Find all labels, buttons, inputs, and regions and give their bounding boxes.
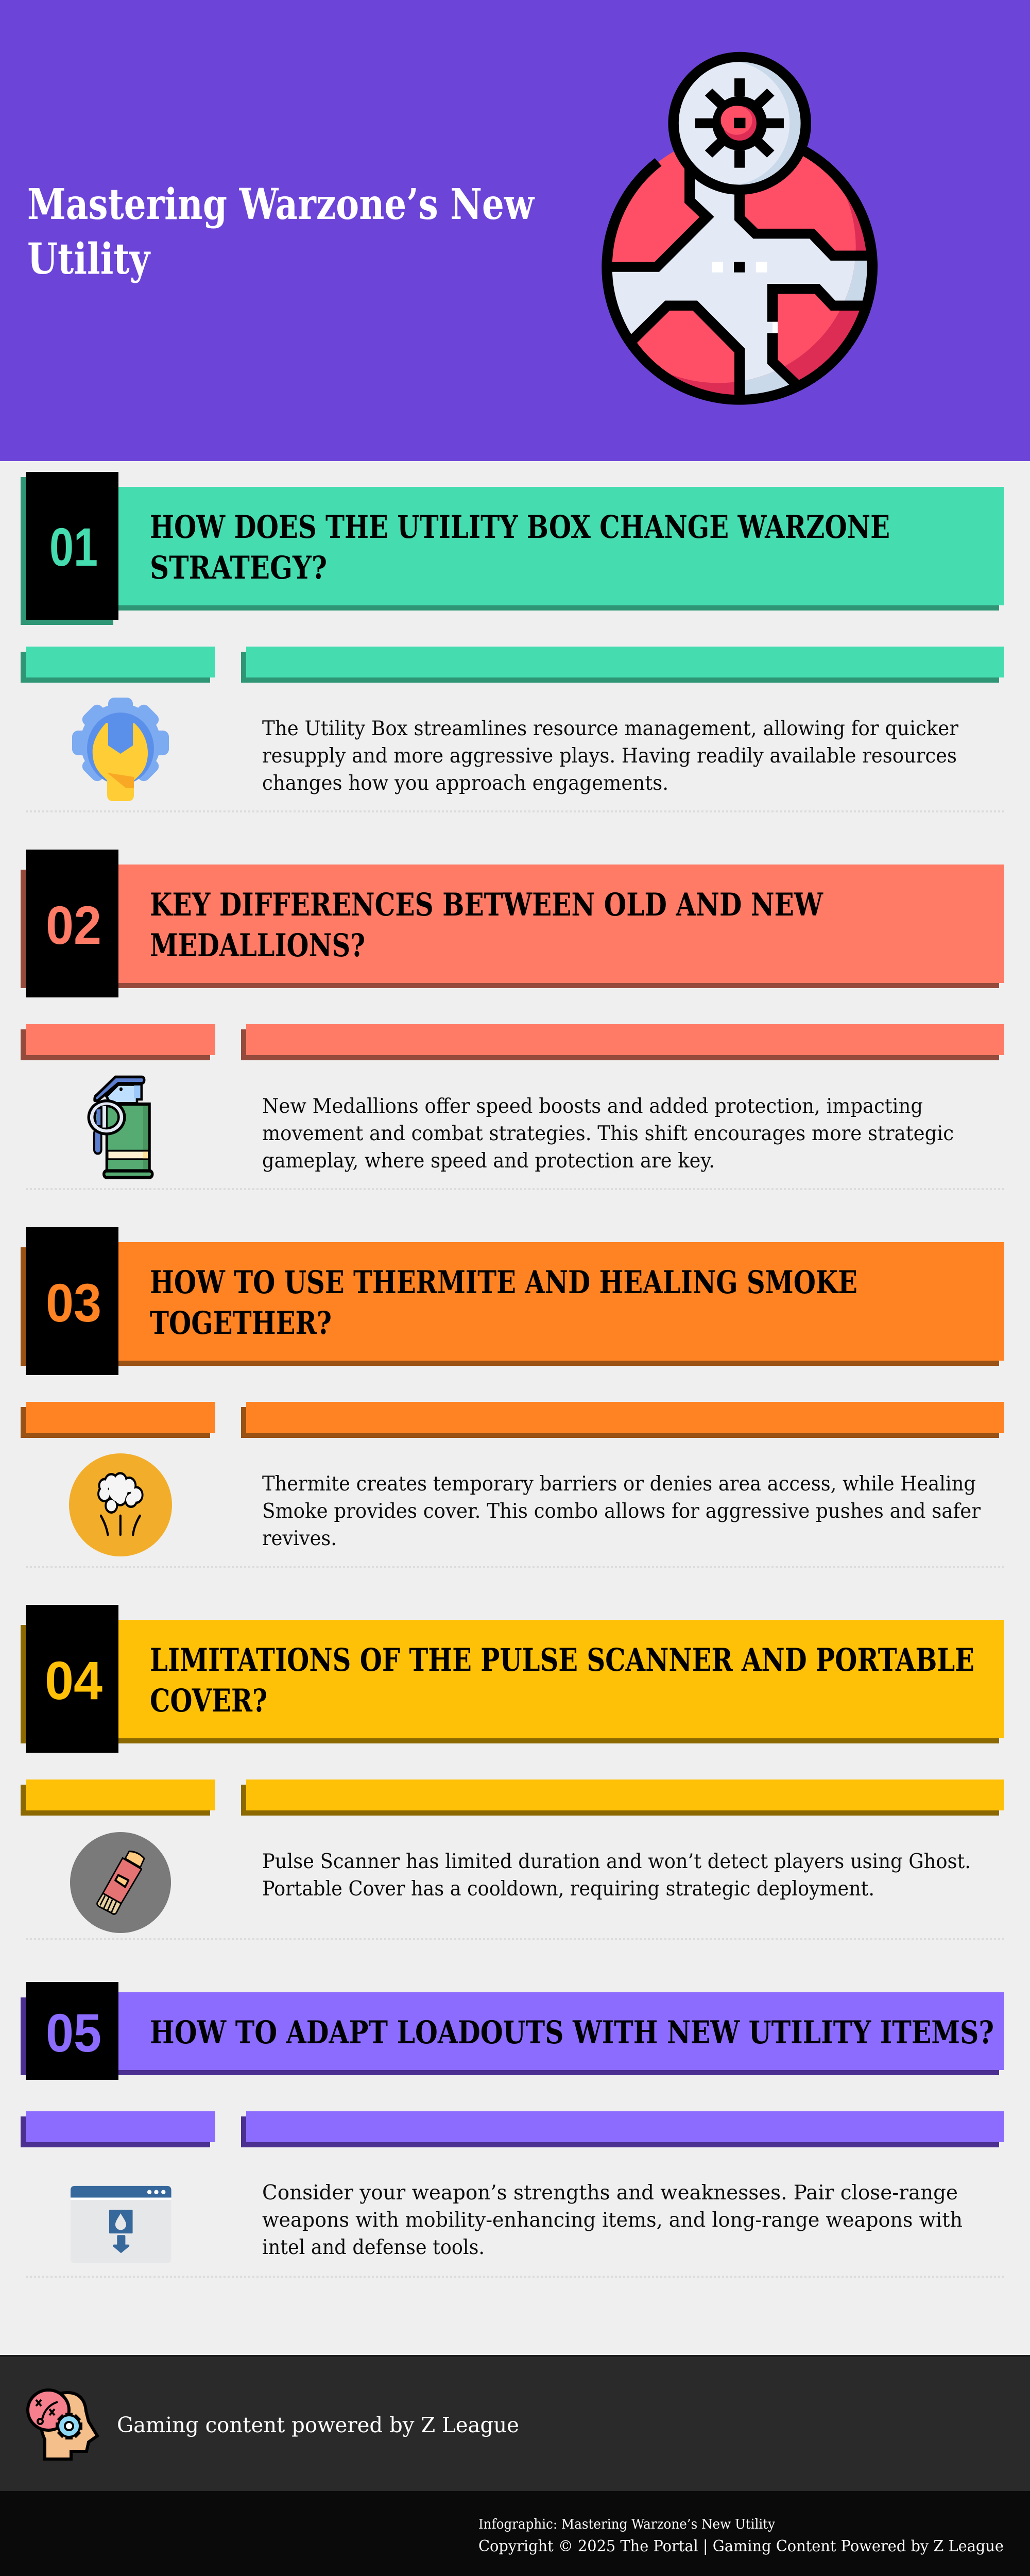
section 5 text: Consider your weapon’s strengths and weaknesses. Pair close-range (262, 2181, 958, 2205)
section 2 number (26, 850, 118, 997)
section 1 text (262, 717, 958, 795)
section 1 text: resupply and more aggressive plays. Having readily available resources (262, 744, 957, 768)
section 1 number (21, 472, 118, 625)
section 3 text: Thermite creates temporary barriers or denies area access, while Healing (262, 1472, 976, 1496)
section 2 number: 02 (46, 895, 101, 956)
section 5 (21, 1982, 1004, 2277)
section 3 (21, 1227, 1004, 1567)
section 2 colour bars (21, 1024, 1004, 1060)
copyright line: Copyright © 2025 The Portal | Gaming Content Powered by Z League (478, 2537, 1004, 2555)
section 4 (21, 1605, 1004, 1939)
section 3 heading band (21, 1242, 1004, 1366)
section 1 text: The Utility Box streamlines resource management, allowing for quicker (262, 717, 958, 740)
section 5 number: 05 (46, 2003, 101, 2063)
section 3 heading band: HOW TO USE THERMITE AND HEALING SMOKE (150, 1264, 857, 1301)
section 5 colour bars (21, 2111, 1004, 2147)
icon: head with strategy brain and gear (28, 2390, 97, 2459)
section 4 colour bars (21, 1780, 1004, 1816)
section 2 text (262, 1095, 954, 1173)
section 3 text: revives. (262, 1527, 337, 1550)
section 5 text: intel and defense tools. (262, 2236, 485, 2259)
title: Mastering Warzone’s New (27, 180, 535, 229)
section 4 text (262, 1850, 971, 1901)
section 2 text: movement and combat strategies. This shift encourages more strategic (262, 1122, 954, 1145)
title: Utility (27, 234, 151, 284)
section 2 (21, 850, 1004, 1189)
icon: grenade (88, 1077, 152, 1177)
section 3 text: Smoke provides cover. This combo allows for aggressive pushes and safer (262, 1500, 981, 1523)
section 3 number: 03 (46, 1273, 101, 1333)
footer tagline: Gaming content powered by Z League (117, 2413, 519, 2437)
icon: smoke cloud (69, 1453, 172, 1556)
section 5 text: weapons with mobility-enhancing items, and long-range weapons with (262, 2209, 963, 2232)
section 2 text: gameplay, where speed and protection are key. (262, 1149, 715, 1173)
icon: browser window with drop (71, 2186, 171, 2263)
section 1 heading band (21, 487, 1004, 611)
section 2 text: New Medallions offer speed boosts and added protection, impacting (262, 1095, 923, 1118)
header panel (0, 0, 1030, 461)
icon: pulse stick (70, 1832, 171, 1933)
section 1 number: 01 (49, 517, 98, 578)
section 1 colour bars (21, 647, 1004, 683)
title (27, 180, 535, 284)
section 2 heading band: KEY DIFFERENCES BETWEEN OLD AND NEW (150, 887, 823, 923)
section 4 text: Portable Cover has a cooldown, requiring strategic deployment. (262, 1877, 874, 1901)
section 5 heading band (21, 1992, 1004, 2075)
footer panel: powered by (0, 2355, 1030, 2491)
section 1 text: changes how you approach engagements. (262, 772, 668, 795)
section 1 heading band: STRATEGY? (150, 550, 327, 586)
section 4 number: 04 (45, 1651, 102, 1711)
section 4 text: Pulse Scanner has limited duration and won’t detect players using Ghost. (262, 1850, 971, 1873)
section 3 colour bars (21, 1402, 1004, 1438)
section 5 number (26, 1982, 118, 2080)
section 5 text (262, 2181, 963, 2259)
icon: gear and wrench (72, 698, 169, 801)
section 2 heading band: MEDALLIONS? (150, 927, 365, 964)
footer panel: copyright (0, 2491, 1030, 2576)
section 3 number (26, 1227, 118, 1375)
section 4 number (26, 1605, 118, 1753)
section 1 (21, 472, 1004, 811)
section 2 heading band (21, 865, 1004, 988)
section 3 heading band: TOGETHER? (150, 1305, 332, 1342)
section 3 text (262, 1472, 981, 1550)
icon: cracked globe with virus (602, 52, 878, 405)
section 4 heading band (21, 1620, 1004, 1743)
infographic credit: Infographic: Mastering Warzone’s New Utility (478, 2517, 775, 2532)
section 4 heading band: COVER? (150, 1683, 267, 1719)
